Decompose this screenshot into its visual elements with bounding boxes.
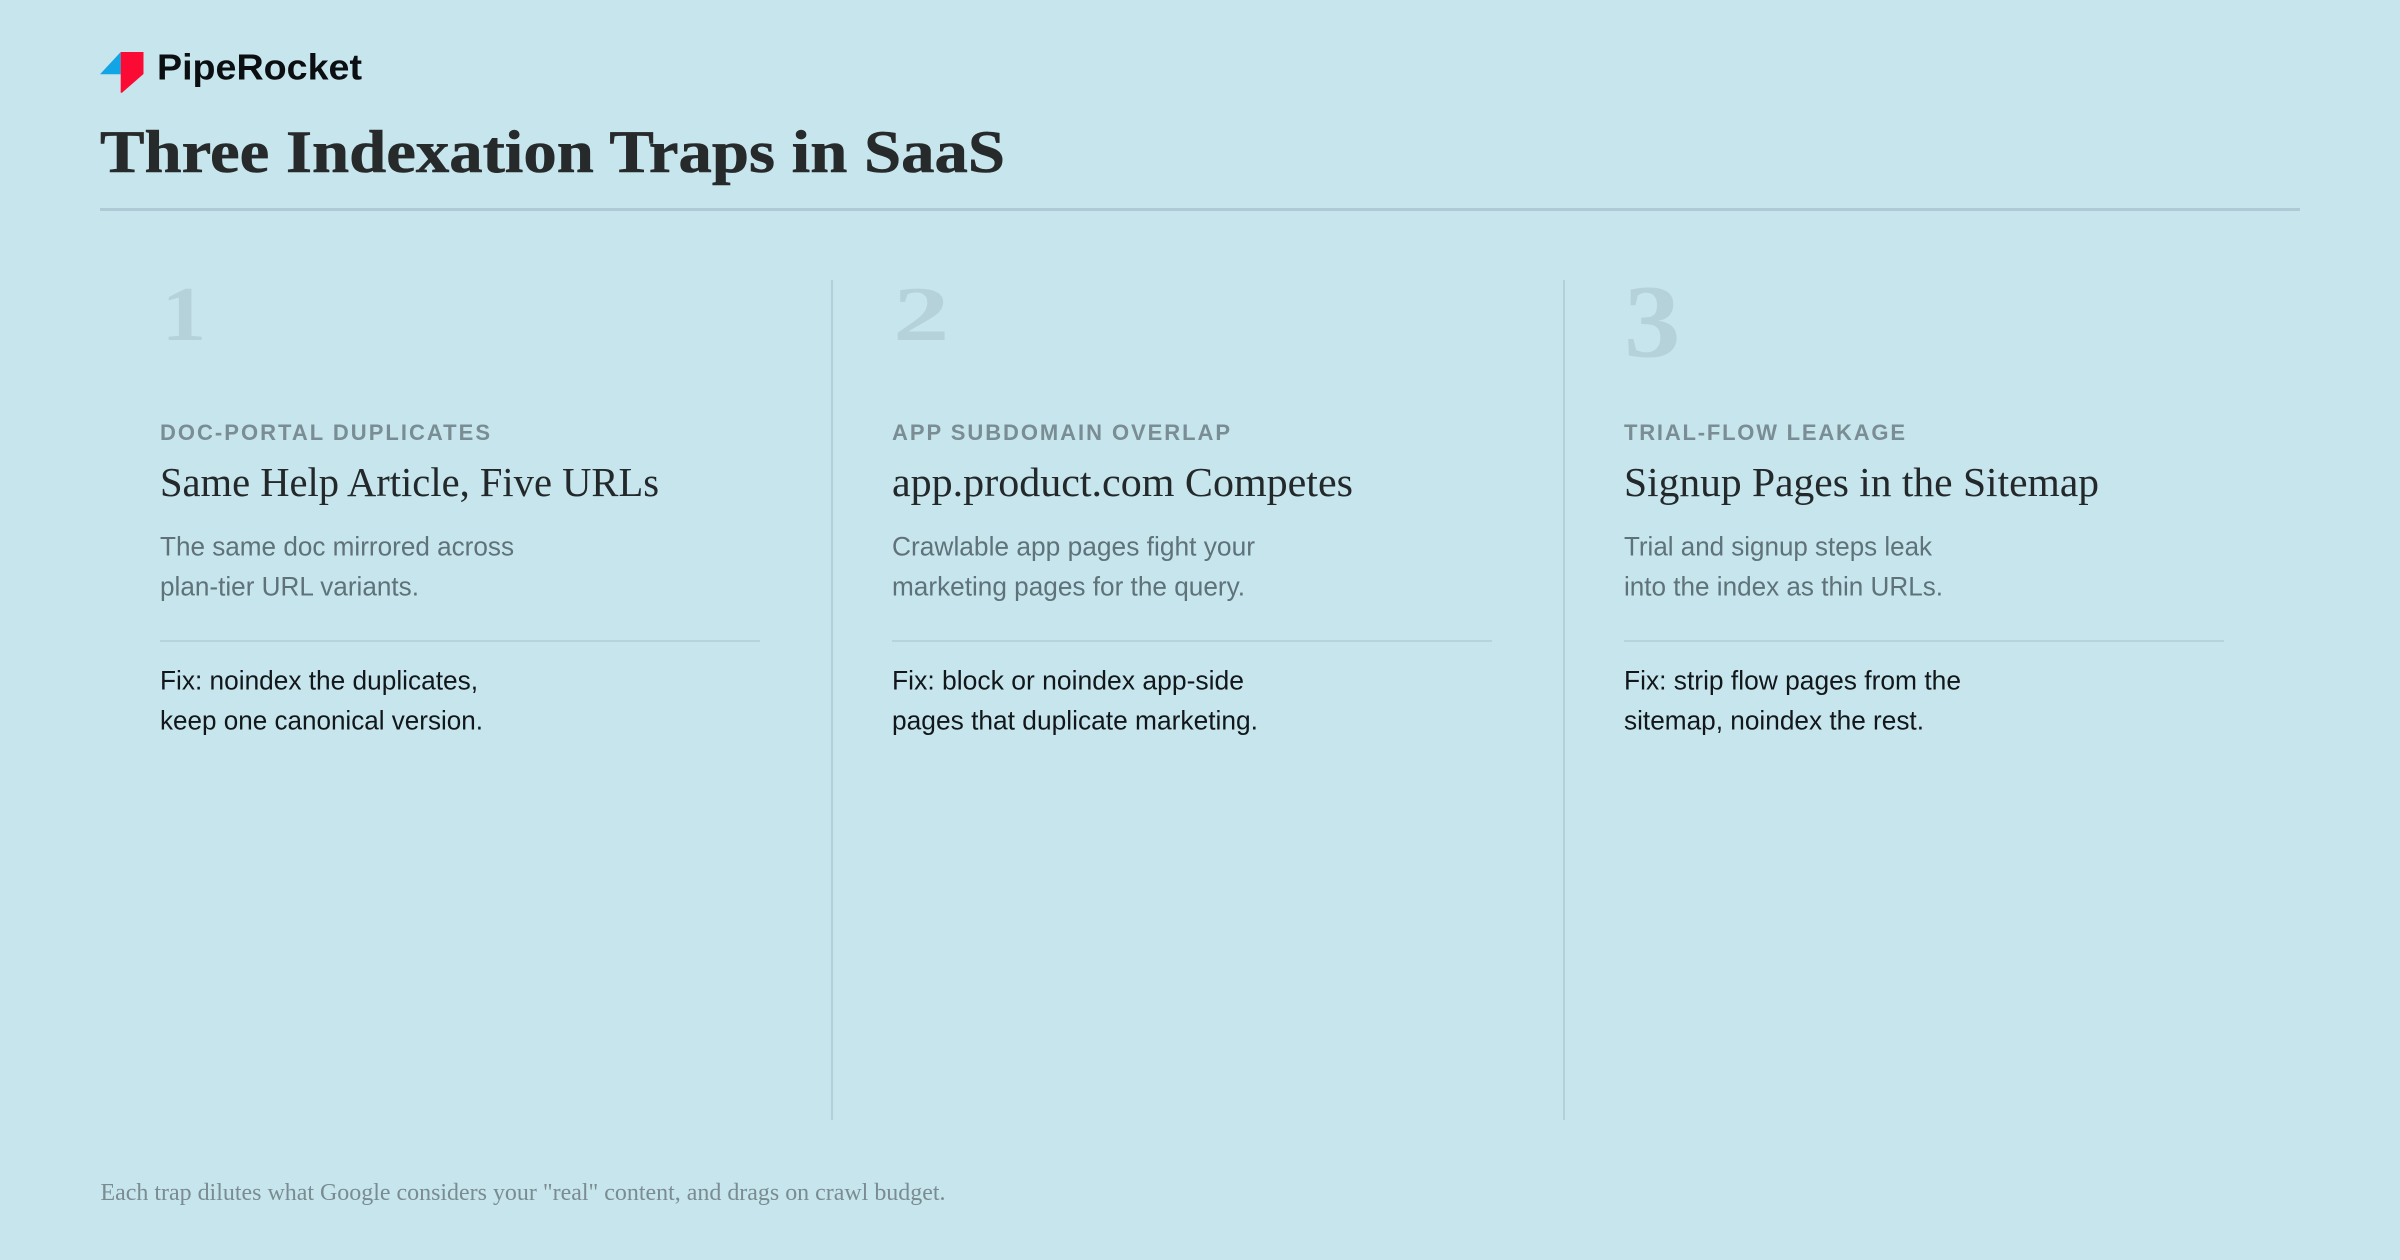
icon: red flag <box>121 52 144 93</box>
description: Trial and signup steps leak <box>1624 532 1933 562</box>
fix: Fix: noindex the duplicates, <box>160 666 478 696</box>
fix: keep one canonical version. <box>160 706 483 736</box>
panel: trap 2 <box>892 271 1492 736</box>
heading: Same Help Article, Five URLs <box>160 459 659 505</box>
footer note: Each trap dilutes what Google considers your "real" content, and drags on crawl budget. <box>100 1180 946 1206</box>
panel: trap 3 <box>1624 265 2224 736</box>
logo: PipeRocket <box>100 46 362 93</box>
eyebrow: TRIAL-FLOW LEAKAGE <box>1624 420 1905 445</box>
fix: Fix: strip flow pages from the <box>1624 666 1961 696</box>
fix: Fix: block or noindex app-side <box>892 666 1244 696</box>
eyebrow: DOC-PORTAL DUPLICATES <box>160 420 490 445</box>
number 2: 2 <box>893 271 949 357</box>
heading: app.product.com Competes <box>892 459 1353 505</box>
title: Three Indexation Traps in SaaS <box>100 119 1005 185</box>
logo wordmark: PipeRocket <box>157 46 362 88</box>
description: The same doc mirrored across <box>160 532 514 562</box>
eyebrow: APP SUBDOMAIN OVERLAP <box>892 420 1230 445</box>
description <box>892 532 1255 602</box>
icon: blue triangle <box>100 52 121 74</box>
number 1: 1 <box>162 272 206 358</box>
description: into the index as thin URLs. <box>1624 572 1943 602</box>
description <box>160 532 514 602</box>
fix: pages that duplicate marketing. <box>892 706 1258 736</box>
number 3: 3 <box>1624 265 1680 379</box>
heading: Signup Pages in the Sitemap <box>1624 459 2099 505</box>
fix <box>1624 666 1961 736</box>
fix <box>892 666 1258 736</box>
fix: sitemap, noindex the rest. <box>1624 706 1924 736</box>
fix <box>160 666 483 736</box>
description: plan-tier URL variants. <box>160 572 419 602</box>
description: Crawlable app pages fight your <box>892 532 1255 562</box>
panel: trap 1 <box>160 272 760 736</box>
description: marketing pages for the query. <box>892 572 1245 602</box>
description <box>1624 532 1943 602</box>
